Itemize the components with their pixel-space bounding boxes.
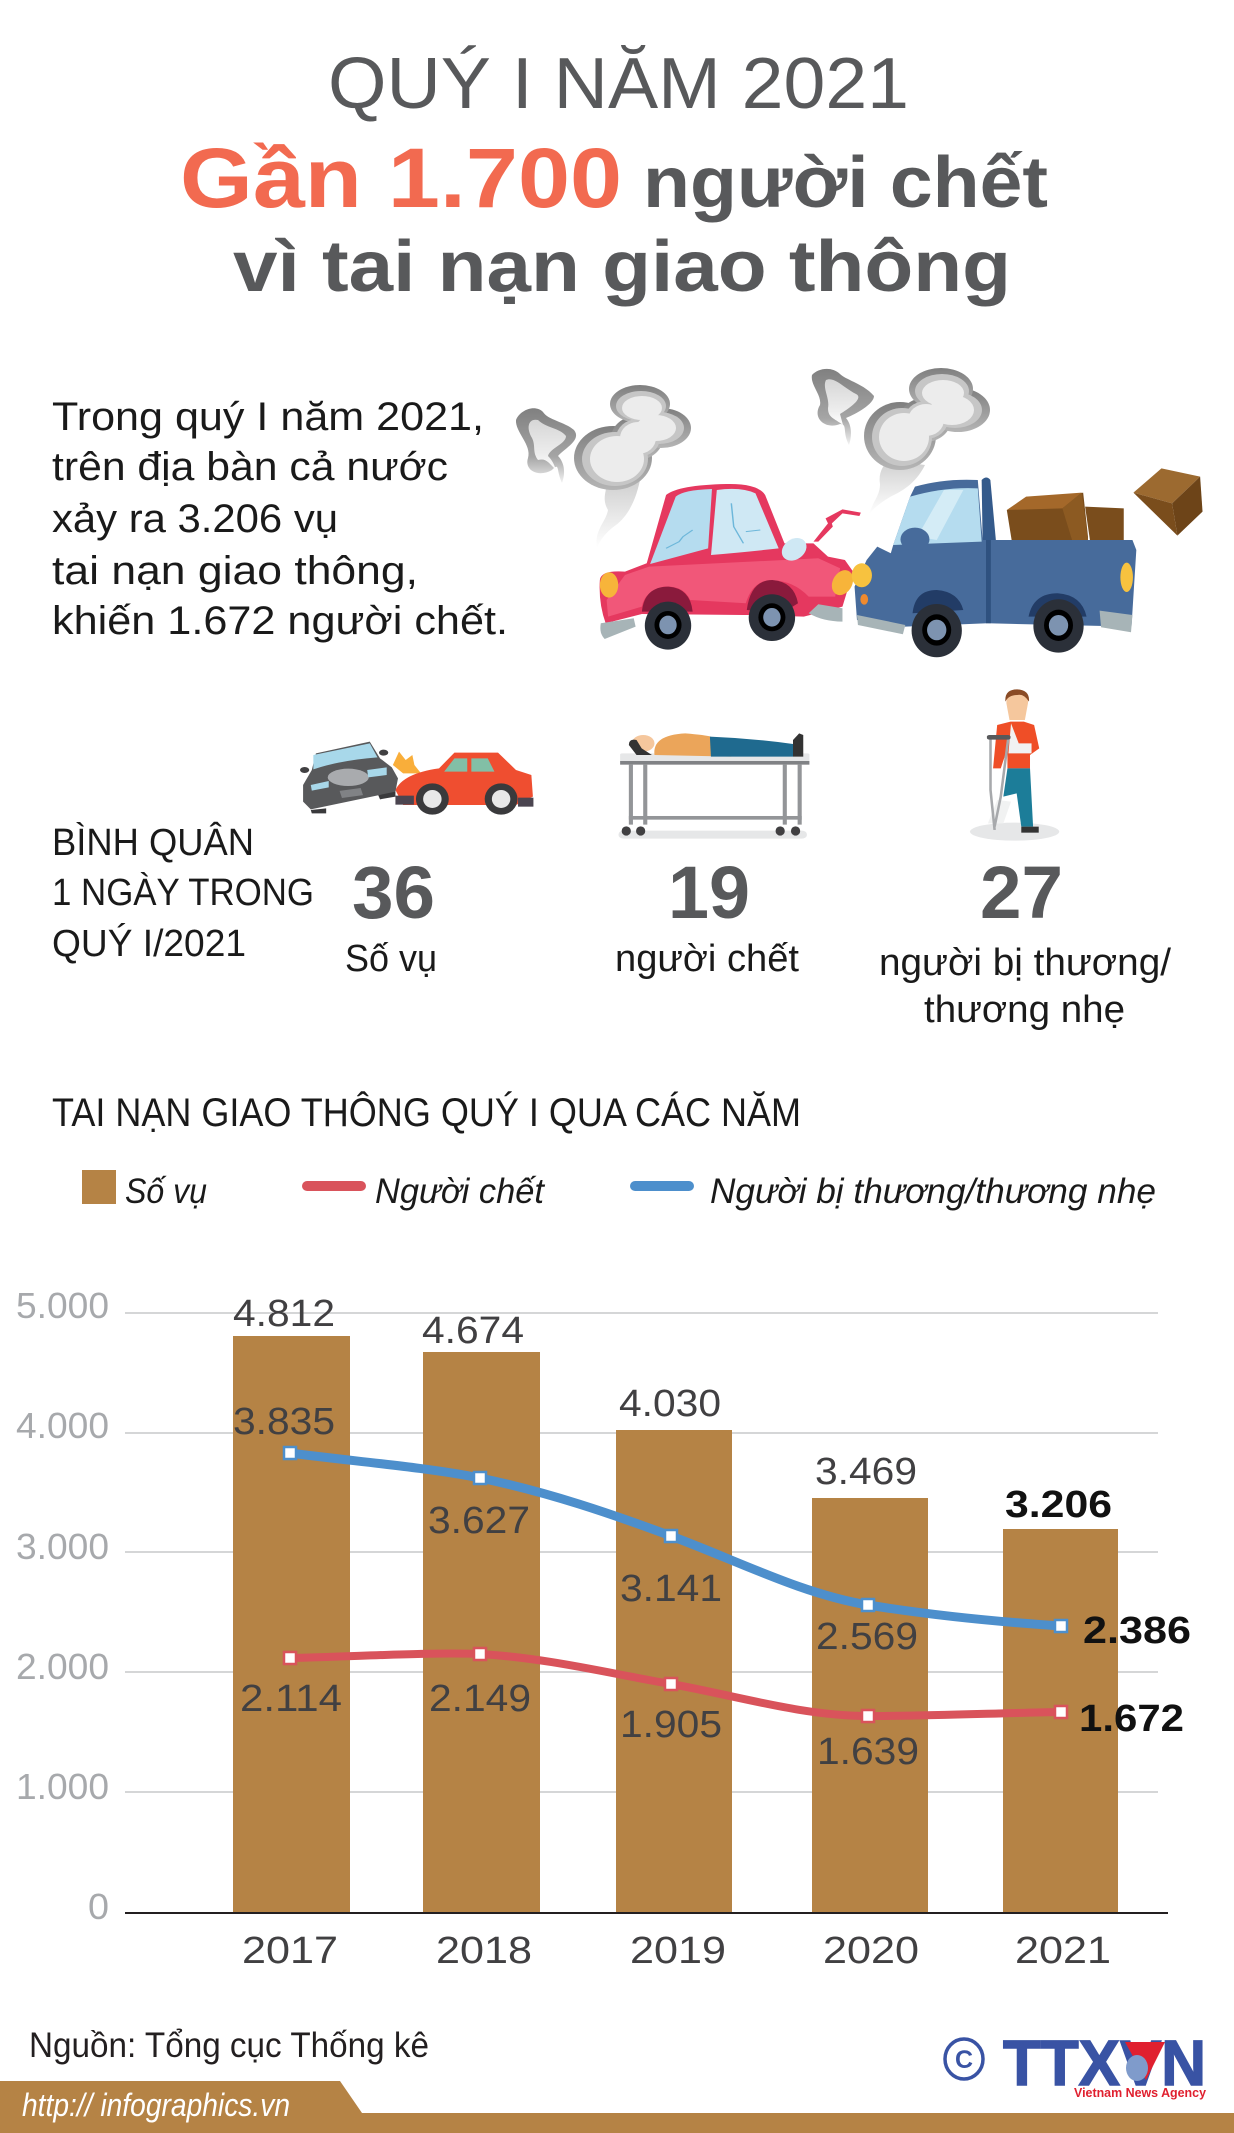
highlighted 2021 labels: 2.386 (1083, 1610, 1191, 1652)
illustration: crash of red car and blue pickup (516, 368, 1203, 657)
title: QUÝ I NĂM 2021 (328, 44, 909, 124)
year labels: 2019 (630, 1930, 726, 1972)
logo: copyright and TTXVN: C (955, 2046, 973, 2074)
logo: copyright and TTXVN: Vietnam News Agency (1074, 2086, 1206, 2100)
icon: smoke left large (574, 385, 691, 548)
year labels: 2020 (823, 1930, 919, 1972)
chart heading: TAI NẠN GIAO THÔNG QUÝ I QUA CÁC NĂM (52, 1090, 801, 1135)
year labels: 2017 (242, 1930, 338, 1972)
stat: 36 accidents: 36 (352, 851, 435, 934)
grid lines and y axis: 4.000 (16, 1405, 109, 1446)
data labels: 2.569 (816, 1616, 918, 1658)
data labels: 2.114 (240, 1678, 342, 1720)
logo: copyright and TTXVN: TTXVN (1003, 2027, 1206, 2099)
grid lines and y axis: 0 (88, 1886, 109, 1927)
footer band (0, 2081, 1234, 2133)
stat: 27 injured (879, 851, 1171, 1031)
grid lines and y axis: 1.000 (16, 1766, 109, 1807)
legend (82, 1170, 1156, 1211)
data labels: 3.835 (233, 1401, 335, 1443)
grid lines and y axis: 3.000 (16, 1526, 109, 1567)
stats label (52, 821, 314, 965)
title (180, 44, 1048, 307)
stat: 36 accidents: Số vụ (345, 938, 437, 980)
line: deaths (284, 1648, 1067, 1722)
intro text: xảy ra 3.206 vụ (52, 497, 338, 541)
data labels: 4.674 (422, 1310, 524, 1352)
grid lines and y axis: 2.000 (16, 1646, 109, 1687)
bar and line chart (16, 1285, 1191, 1972)
intro text (52, 395, 508, 643)
data labels: 4.812 (233, 1293, 335, 1335)
title: vì tai nạn giao thông (233, 227, 1011, 307)
line: injured (284, 1447, 1067, 1632)
icon: smoke right small (812, 369, 874, 445)
legend: Người bị thương/thương nhẹ (710, 1172, 1156, 1211)
icon: injured man with crutch (970, 689, 1059, 841)
stats label: QUÝ I/2021 (52, 922, 246, 965)
data labels: 3.627 (428, 1500, 530, 1542)
highlighted 2021 labels: 3.206 (1005, 1484, 1112, 1526)
stats label: 1 NGÀY TRONG (52, 871, 314, 914)
grid lines and y axis: 5.000 (16, 1285, 109, 1326)
data labels: 1.639 (817, 1731, 919, 1773)
year labels: 2021 (1015, 1930, 1111, 1972)
data labels: 3.141 (620, 1568, 722, 1610)
icon: red car (600, 484, 861, 650)
intro text: tai nạn giao thông, (52, 549, 418, 593)
year labels: 2018 (436, 1930, 532, 1972)
stat: 19 deaths (615, 851, 799, 980)
data labels: 4.030 (619, 1383, 721, 1425)
data labels: 3.469 (815, 1451, 917, 1493)
icon: flying crate (1133, 468, 1203, 536)
legend: Số vụ (125, 1172, 207, 1211)
intro text: trên địa bàn cả nước (52, 445, 448, 489)
icon: two cars collision (300, 742, 533, 815)
icon: smoke right large (864, 368, 990, 514)
icon: blue pickup (852, 477, 1136, 657)
data labels (233, 1293, 919, 1773)
year labels (242, 1930, 1111, 1972)
title: Gần 1.700 (180, 131, 622, 225)
bars (233, 1336, 1118, 1913)
data labels: 1.905 (620, 1704, 722, 1746)
stat: 27 injured: thương nhẹ (924, 989, 1125, 1031)
footer band: http:// infographics.vn (22, 2087, 290, 2123)
highlighted 2021 labels: 1.672 (1079, 1698, 1184, 1740)
icon: smoke left small (516, 408, 576, 483)
icon: person on stretcher (619, 733, 809, 839)
title: người chết (643, 143, 1048, 223)
stat: 19 deaths: người chết (615, 938, 799, 980)
stats label: BÌNH QUÂN (52, 821, 254, 864)
intro text: khiến 1.672 người chết. (52, 599, 508, 643)
stat: 27 injured: người bị thương/ (879, 942, 1171, 984)
source: Nguồn: Tổng cục Thống kê (29, 2026, 429, 2065)
stat: 36 accidents (345, 851, 437, 980)
grid lines and y axis (16, 1285, 1158, 1927)
intro text: Trong quý I năm 2021, (52, 395, 484, 439)
highlighted 2021 labels (1005, 1484, 1191, 1740)
stat: 19 deaths: 19 (668, 851, 750, 934)
legend: Người chết (375, 1172, 545, 1211)
stat: 27 injured: 27 (980, 851, 1063, 934)
data labels: 2.149 (429, 1678, 531, 1720)
